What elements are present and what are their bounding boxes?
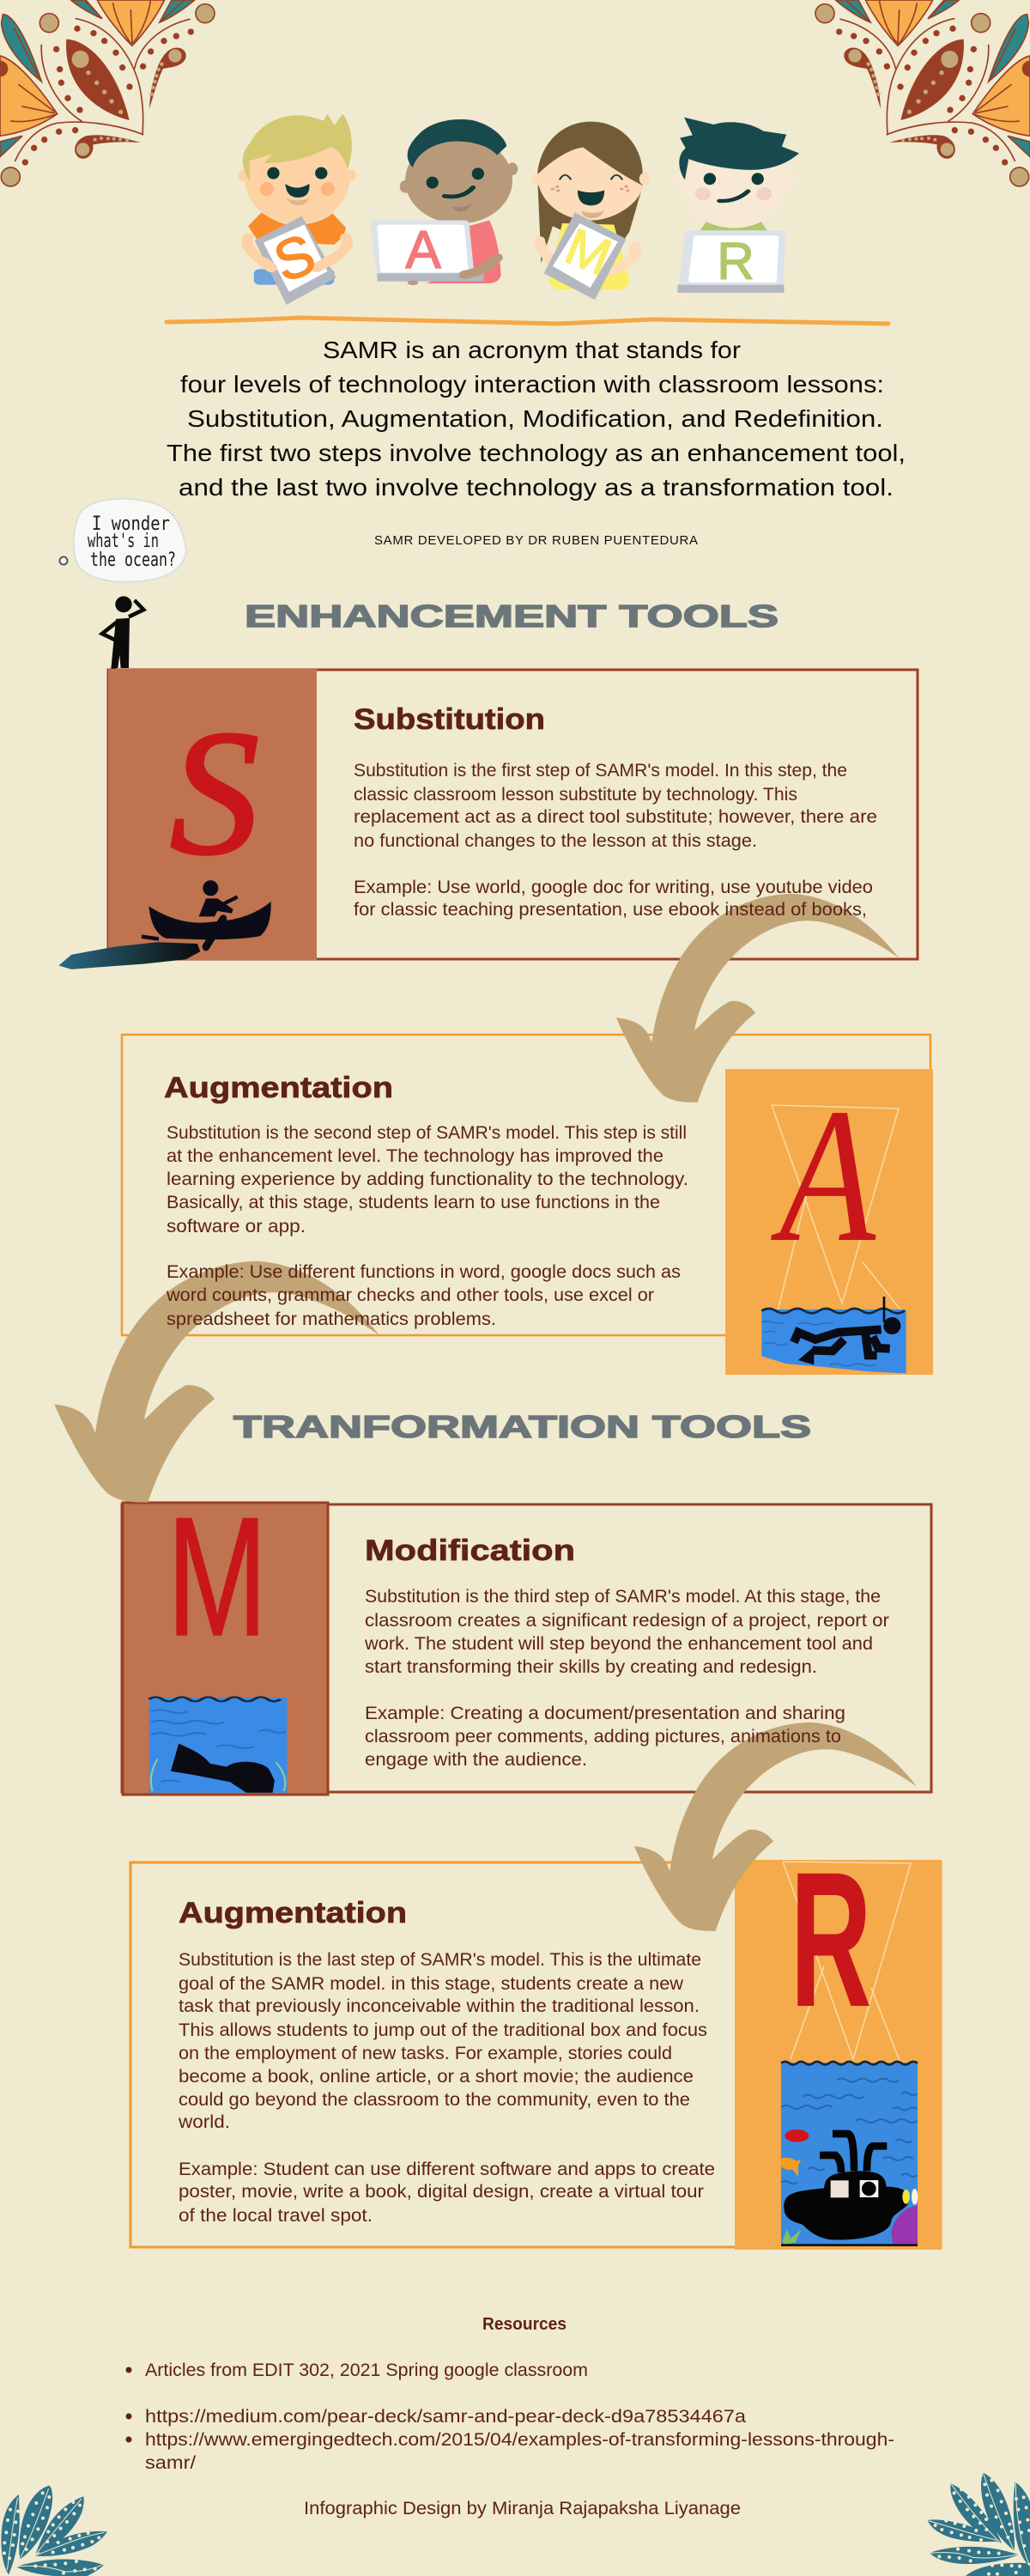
text block: last step: on the employment of new tasks. For example, stories could bbox=[179, 2044, 672, 2063]
text block: substitution: Example: Use world, google doc for writing, use youtube video bbox=[354, 878, 873, 897]
text block: augmentation: Substitution is the second step of SAMR's model. This step is still bbox=[167, 1123, 687, 1143]
heading: augmentation (last step): Augmentation bbox=[179, 1897, 407, 1929]
text block: modification: work. The student will step beyond the enhancement tool and bbox=[364, 1634, 873, 1654]
intro text: SAMR is an acronym that stands for bbox=[323, 337, 741, 363]
thought bubble: the ocean? bbox=[90, 550, 176, 571]
child with A laptop bbox=[371, 119, 518, 285]
illustration: four children holding S A M R tablets bbox=[239, 114, 799, 305]
icon: standing figure looking out bbox=[102, 596, 143, 669]
resources list: Articles from EDIT 302, 2021 Spring google classroom bbox=[145, 2360, 588, 2380]
intro text bbox=[167, 337, 906, 501]
text block: substitution: Substitution is the first step of SAMR's model. In this step, the bbox=[354, 761, 847, 781]
resources list: samr/ bbox=[145, 2453, 196, 2473]
heading: transformation tools: TRANFORMATION TOOLS bbox=[233, 1409, 811, 1444]
icon: diver in water bbox=[761, 1297, 906, 1373]
text block: modification: start transforming their skills by creating and redesign. bbox=[365, 1657, 817, 1677]
text block: augmentation: at the enhancement level. The technology has improved the bbox=[167, 1146, 663, 1166]
intro text: four levels of technology interaction with classroom lessons: bbox=[180, 371, 884, 398]
panel: M with swimmer bbox=[123, 1482, 328, 1795]
letter R: R bbox=[790, 1832, 872, 2047]
credit line: SAMR DEVELOPED BY DR RUBEN PUENTEDURA bbox=[374, 533, 698, 548]
card frame: redefinition bbox=[130, 1862, 941, 2247]
text block: augmentation: spreadsheet for mathematics problems. bbox=[167, 1309, 496, 1329]
child with R laptop: R bbox=[717, 233, 754, 290]
thought bubble bbox=[60, 499, 186, 582]
arrow: augmentation to modification bbox=[54, 1261, 379, 1503]
child with M tablet: M bbox=[558, 217, 619, 287]
panel: R with submarine bbox=[735, 1832, 942, 2250]
heading: resources: Resources bbox=[482, 2315, 566, 2334]
text block: substitution: classic classroom lesson substitute by technology. This bbox=[354, 785, 797, 805]
text block: last step: poster, movie, write a book, digital design, create a virtual tour bbox=[179, 2182, 704, 2202]
text block: substitution: no functional changes to the lesson at this stage. bbox=[354, 831, 757, 851]
arrow: substitution to augmentation bbox=[616, 894, 899, 1103]
intro text: The first two steps involve technology as an enhancement tool, bbox=[167, 440, 906, 466]
card frame: modification bbox=[122, 1504, 931, 1792]
text block: augmentation: Example: Use different functions in word, google docs such as bbox=[167, 1262, 681, 1282]
heading: augmentation: Augmentation bbox=[164, 1072, 393, 1104]
card frame: substitution bbox=[108, 670, 918, 959]
corner ornament: top left bbox=[0, 0, 215, 186]
letter S: S bbox=[170, 694, 259, 891]
footer credit: Infographic Design by Miranja Rajapaksha Liyanage bbox=[304, 2499, 741, 2518]
text block: augmentation bbox=[164, 1072, 688, 1329]
intro text: and the last two involve technology as a transformation tool. bbox=[179, 474, 894, 501]
text block: last step bbox=[178, 1897, 715, 2226]
corner ornament: top right bbox=[815, 0, 1030, 186]
letter A: A bbox=[770, 1069, 876, 1282]
text block: last step: could go beyond the classroom to the community, even to the bbox=[179, 2090, 690, 2110]
text block: augmentation: software or app. bbox=[167, 1217, 306, 1236]
text block: last step: world. bbox=[178, 2112, 230, 2132]
text block: last step: Example: Student can use different software and apps to create bbox=[179, 2160, 715, 2179]
heading: modification: Modification bbox=[365, 1534, 575, 1567]
text block: last step: task that previously inconceivable within the traditional lesson. bbox=[179, 1996, 700, 2016]
child with R laptop bbox=[673, 118, 799, 300]
text block: modification bbox=[364, 1534, 889, 1770]
arrow: modification to redefinition bbox=[634, 1722, 917, 1931]
icon: swimmer in water bbox=[149, 1697, 287, 1793]
text block: modification: classroom peer comments, adding pictures, animations to bbox=[365, 1727, 841, 1747]
text block: augmentation: word counts, grammar checks and other tools, use excel or bbox=[166, 1285, 654, 1305]
leaves: bottom right bbox=[928, 2473, 1030, 2576]
resources list bbox=[125, 2360, 894, 2473]
child with S tablet: S bbox=[266, 222, 323, 294]
heading: substitution: Substitution bbox=[354, 703, 545, 736]
text block: substitution bbox=[354, 703, 877, 920]
text block: substitution: replacement act as a direct tool substitute; however, there are bbox=[354, 807, 877, 827]
text block: last step: This allows students to jump out of the traditional box and focus bbox=[179, 2020, 707, 2040]
icon: person in canoe bbox=[58, 880, 271, 969]
resources list: https://medium.com/pear-deck/samr-and-pear-deck-d9a78534467a bbox=[145, 2407, 746, 2427]
child with A laptop: A bbox=[405, 221, 441, 280]
thought bubble: I wonder bbox=[92, 513, 170, 535]
panel: A with diver bbox=[725, 1069, 933, 1375]
sun rays bbox=[772, 1105, 900, 1311]
thought bubble: what's in bbox=[88, 531, 159, 552]
child with S tablet bbox=[239, 114, 356, 305]
panel: S with canoe bbox=[58, 669, 317, 969]
intro text: Substitution, Augmentation, Modification, and Redefinition. bbox=[187, 405, 883, 432]
resources list: https://www.emergingedtech.com/2015/04/examples-of-transforming-lessons-through- bbox=[145, 2430, 894, 2450]
text block: modification: Substitution is the third step of SAMR's model. At this stage, the bbox=[365, 1587, 881, 1607]
icon: submarine under water bbox=[781, 2062, 918, 2246]
text block: modification: engage with the audience. bbox=[365, 1750, 587, 1770]
card frame: augmentation bbox=[122, 1035, 930, 1335]
text block: last step: Substitution is the last step of SAMR's model. This is the ultimate bbox=[179, 1950, 701, 1970]
text block: modification: classroom creates a significant redesign of a project, report or bbox=[365, 1611, 889, 1631]
heading: enhancement tools: ENHANCEMENT TOOLS bbox=[245, 598, 779, 634]
text block: modification: Example: Creating a document/presentation and sharing bbox=[365, 1704, 845, 1723]
text block: last step: goal of the SAMR model. in this stage, students create a new bbox=[179, 1974, 684, 1994]
sun rays bbox=[783, 1862, 911, 2061]
letter M: M bbox=[167, 1482, 268, 1671]
text block: substitution: for classic teaching presentation, use ebook instead of books, bbox=[354, 900, 867, 920]
child with M tablet bbox=[531, 122, 650, 300]
text block: last step: become a book, online article, or a short movie; the audience bbox=[179, 2067, 694, 2087]
text block: last step: of the local travel spot. bbox=[179, 2206, 373, 2226]
text block: augmentation: Basically, at this stage, students learn to use functions in the bbox=[167, 1193, 660, 1212]
leaves: bottom left bbox=[0, 2486, 107, 2576]
divider: orange hand-drawn line bbox=[167, 318, 888, 324]
text block: augmentation: learning experience by adding functionality to the technology. bbox=[167, 1170, 688, 1189]
